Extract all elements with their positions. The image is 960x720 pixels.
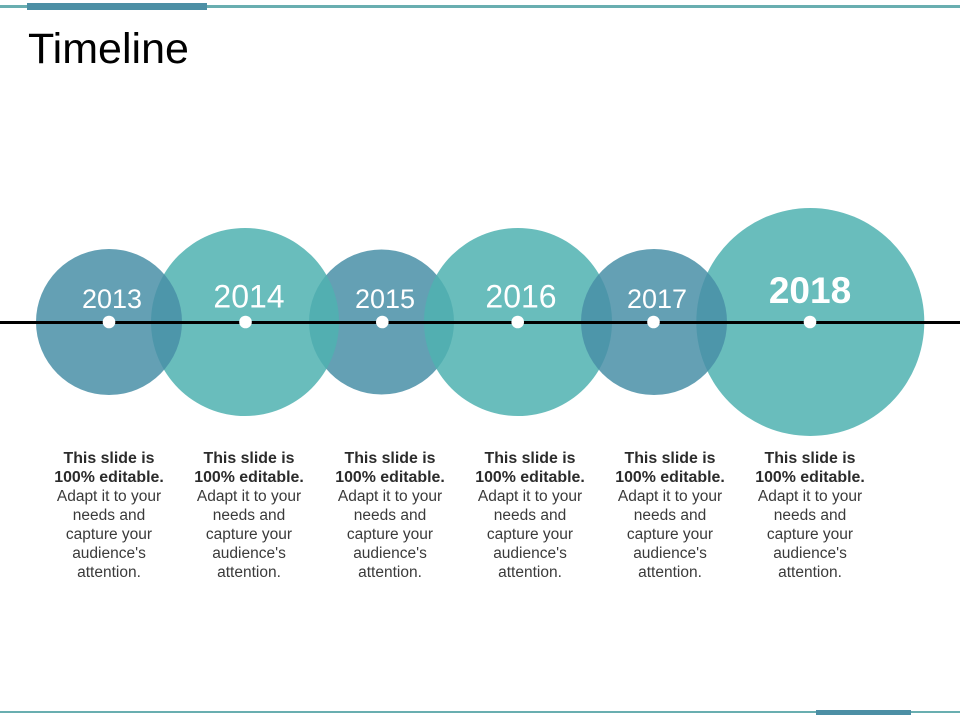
caption: 2013: 100% editable. [54,468,164,486]
caption: 2017: attention. [638,564,702,580]
caption: 2014: capture your [206,526,292,542]
title: Timeline [28,25,189,73]
timeline markers [103,316,816,328]
circle: 2014 [151,228,339,416]
caption: 2014: 100% editable. [194,468,304,486]
circle: 2017 [581,249,727,395]
circle: 2015 [309,250,454,394]
caption: 2015 [335,450,445,580]
caption: 2016: attention. [498,564,562,580]
caption: 2014: This slide is [204,450,294,466]
year labels: 2016 [485,278,557,314]
caption: 2013: capture your [66,526,152,542]
caption: 2017: This slide is [625,450,715,466]
caption: 2013 [54,450,164,580]
year labels: 2017 [627,284,687,314]
caption: 2015: audience's [353,544,427,562]
caption: 2015: This slide is [345,450,435,466]
circle: 2016 [424,228,612,416]
caption: 2017: capture your [627,526,713,542]
caption: 2015: attention. [358,564,422,580]
caption: 2018: audience's [773,544,847,562]
caption: 2018: attention. [778,564,842,580]
caption: 2018: needs and [774,506,846,524]
caption: 2018: capture your [767,526,853,542]
caption: 2016: audience's [493,544,567,562]
caption: 2015: Adapt it to your [338,488,442,504]
caption: 2018: This slide is [765,450,855,466]
caption: 2013: needs and [73,506,145,524]
caption: 2015: capture your [347,526,433,542]
year labels: 2018 [769,270,851,311]
caption: 2017: needs and [634,506,706,524]
caption: 2016 [475,450,585,580]
bottom accent bar [816,710,911,715]
caption: 2013: Adapt it to your [57,488,161,504]
caption: 2016: Adapt it to your [478,488,582,504]
timeline axis [0,321,960,324]
year labels: 2014 [213,278,285,314]
caption: 2018 [755,450,865,580]
caption: 2018: 100% editable. [755,468,865,486]
caption: 2014: audience's [212,544,286,562]
caption: 2014: attention. [217,564,281,580]
caption: 2017: audience's [633,544,707,562]
caption: 2015: 100% editable. [335,468,445,486]
caption: 2016: 100% editable. [475,468,585,486]
top accent bar [27,3,207,10]
caption: 2015: needs and [354,506,426,524]
year labels: 2013 [82,284,142,314]
caption: 2013: This slide is [64,450,154,466]
caption: 2018: Adapt it to your [758,488,862,504]
top rule [0,5,960,8]
caption: 2017: 100% editable. [615,468,725,486]
caption: 2016: This slide is [485,450,575,466]
caption: 2016: needs and [494,506,566,524]
caption: 2017: Adapt it to your [618,488,722,504]
year labels: 2015 [355,284,415,314]
bottom rule [0,711,960,713]
circle: 2018 [696,208,924,436]
caption: 2014 [194,450,304,580]
circle: 2013 [36,249,182,395]
caption: 2017 [615,450,725,580]
caption: 2013: audience's [72,544,146,562]
caption: 2014: needs and [213,506,285,524]
caption: 2013: attention. [77,564,141,580]
year labels [82,270,851,314]
caption: 2014: Adapt it to your [197,488,301,504]
caption: 2016: capture your [487,526,573,542]
